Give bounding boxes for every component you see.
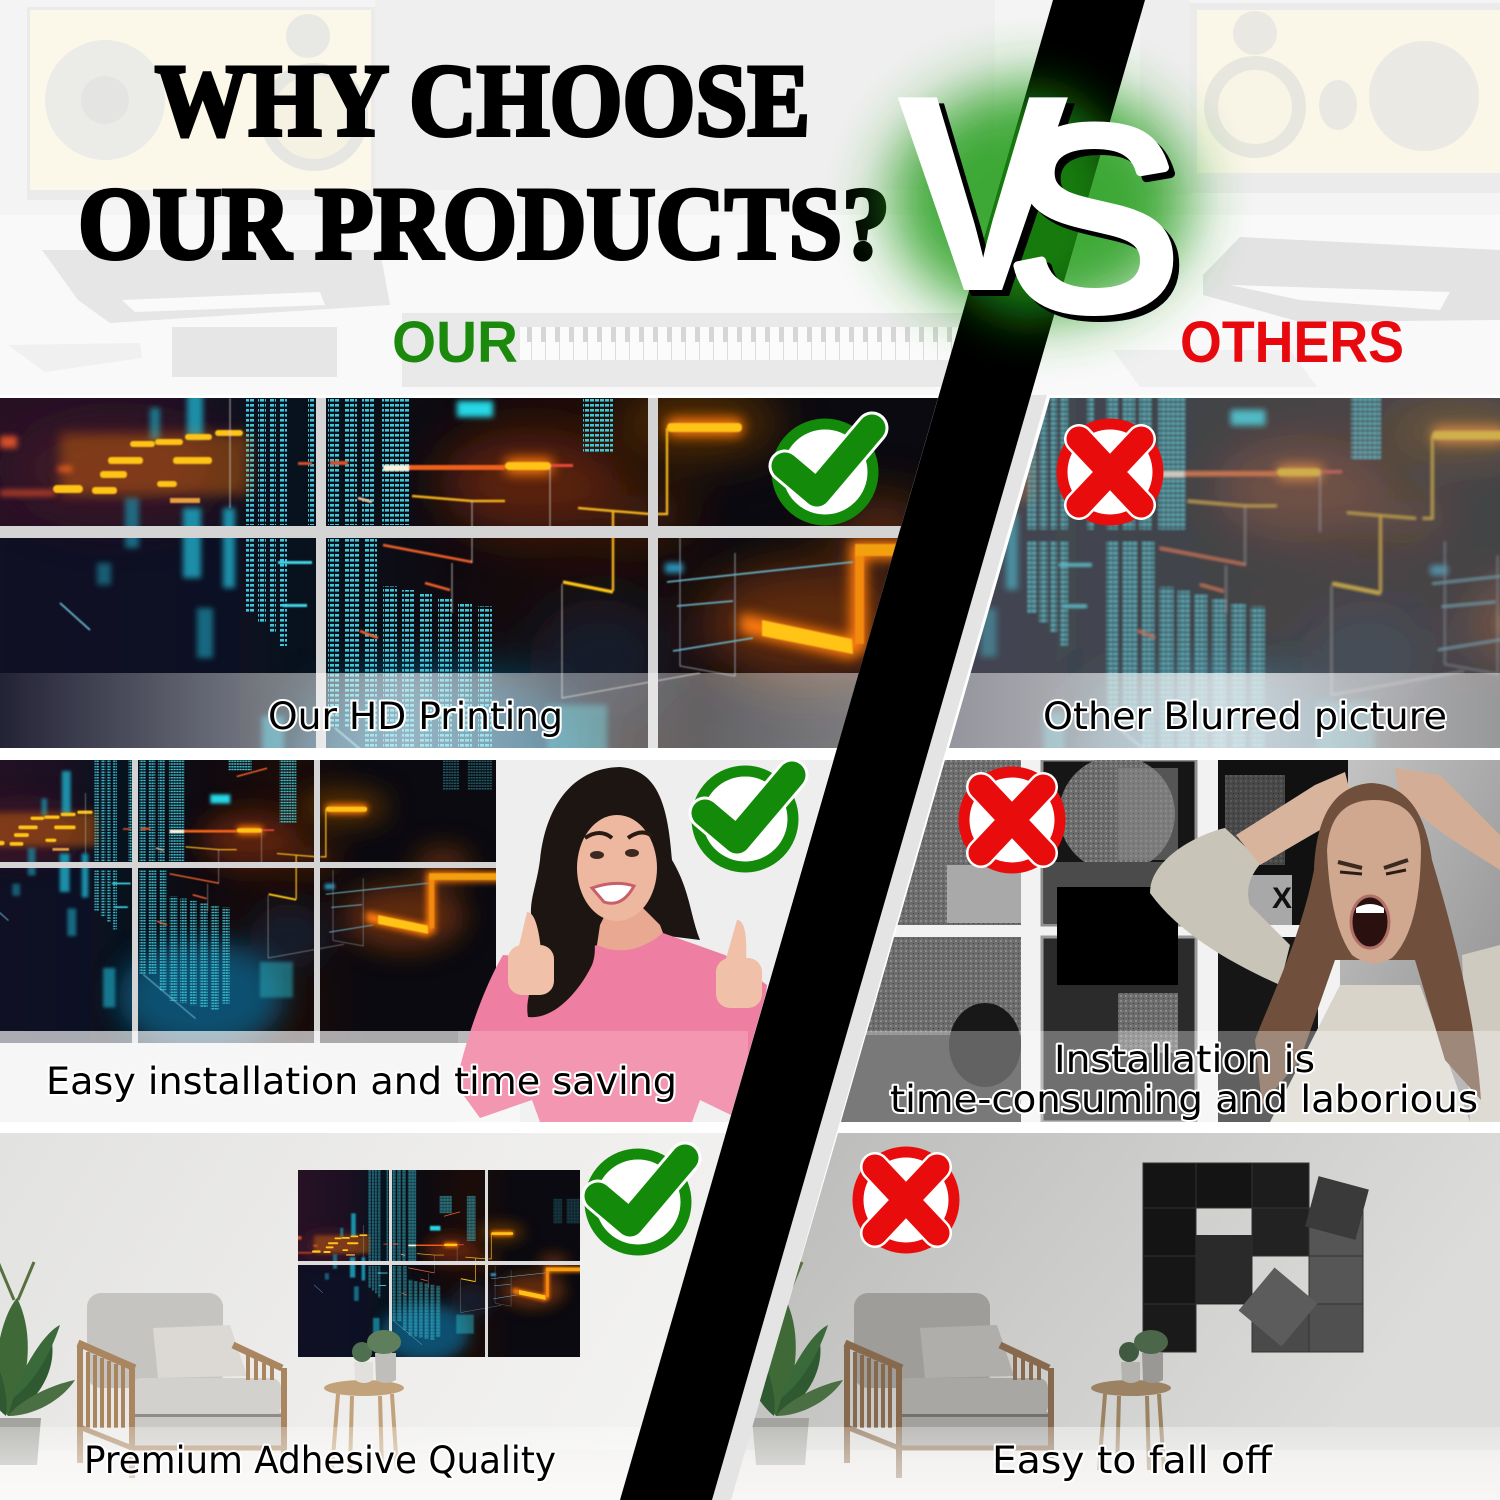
VS emblem: V [903, 43, 1078, 356]
caption strip [458, 1031, 748, 1122]
grey strip beside divider [712, 395, 1047, 1500]
smiling woman [456, 767, 767, 1122]
caption strip [730, 1427, 1500, 1500]
icon: red cross 3 [858, 1152, 954, 1248]
panel: easy to fall off [730, 1133, 1500, 1500]
VS emblem: S [1012, 78, 1187, 371]
room wall [0, 1133, 726, 1450]
title: WHY CHOOSE [155, 44, 810, 158]
caption: Premium Adhesive Quality [84, 1439, 556, 1482]
room wall [730, 1133, 1500, 1433]
caption strip [0, 673, 900, 748]
green glow [890, 82, 1190, 318]
icon: red cross 2 [964, 772, 1060, 868]
VS emblem: V [896, 37, 1071, 350]
panel: our HD printing [0, 398, 938, 748]
faded studio backdrop [0, 0, 1500, 395]
caption strip [840, 1031, 1500, 1122]
title [78, 44, 890, 281]
panel: easy installation [0, 683, 840, 1122]
VS emblem [896, 37, 1187, 371]
title: OUR PRODUCTS? [78, 167, 890, 281]
fallen foam squares [1143, 1163, 1369, 1352]
mini art print [279, 1167, 588, 1362]
installed art print [0, 760, 496, 1043]
heading: our: OUR [392, 310, 518, 375]
caption: time-consuming and laborious [890, 1078, 1478, 1121]
caption strip [0, 1427, 640, 1500]
icon: green check 1 [777, 424, 873, 520]
panel: laborious installation [835, 756, 1500, 1122]
green glow over divider [935, 90, 1125, 320]
caption: Easy to fall off [992, 1439, 1274, 1482]
armchair and table [845, 1293, 1171, 1478]
heading: others: OTHERS [1180, 310, 1404, 375]
screaming woman [1150, 768, 1500, 1122]
sharp art print [0, 398, 938, 748]
caption: Installation is [1054, 1038, 1315, 1081]
icon: green check 3 [590, 1154, 686, 1250]
black diagonal divider [620, 0, 1145, 1500]
failed foam panels [835, 756, 1348, 1122]
plant [0, 1262, 75, 1465]
icon: green check 2 [697, 771, 793, 867]
plant [752, 1261, 843, 1465]
blurred art print [949, 398, 1500, 748]
caption: Other Blurred picture [1043, 695, 1447, 738]
armchair and table [78, 1293, 404, 1478]
caption: Easy installation and time saving [46, 1060, 677, 1103]
icon: red cross 1 [1062, 424, 1158, 520]
caption [890, 1038, 1478, 1121]
caption strip [940, 673, 1500, 748]
panel: premium adhesive [0, 1133, 760, 1500]
failed foam panels: X [1272, 882, 1292, 915]
caption: Our HD Printing [268, 695, 563, 738]
VS emblem: S [1006, 72, 1181, 365]
panel: other blurred picture [949, 398, 1500, 748]
